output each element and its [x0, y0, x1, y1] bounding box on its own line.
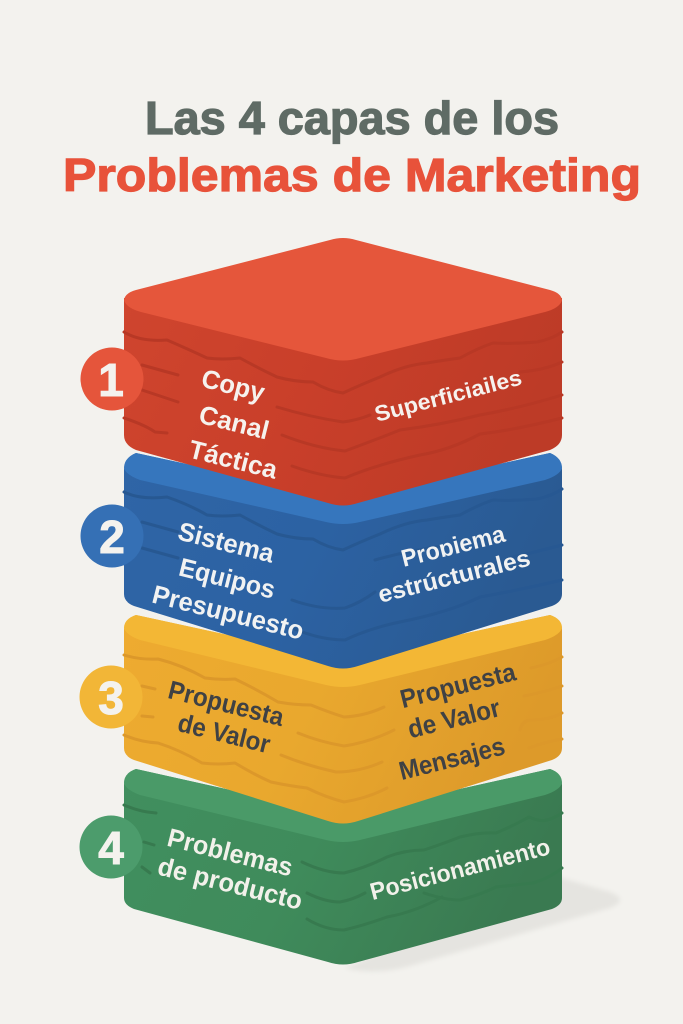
layer 4 left text: de producto: de producto [155, 851, 306, 916]
layer 2 body [124, 453, 562, 668]
layer 2 top rim [124, 453, 562, 524]
badge 1 [80, 348, 144, 410]
layer 3 right text: propuesta: Propuesta [397, 656, 519, 714]
layer 1 wave lines [124, 332, 562, 478]
layer 1 left text: canal: Canal [196, 399, 272, 445]
layer 2 right text: problema: Proɒiema [398, 521, 508, 573]
layer 1 left text: copy: Copy [198, 363, 268, 408]
layer 2: blue [124, 453, 562, 668]
layer 4 wave lines [124, 805, 562, 930]
layer 2 right text: estructurales: estrúcturales [375, 545, 533, 609]
layer 1 right text: Superficiailes [372, 365, 524, 427]
badge 2 [80, 504, 144, 568]
title line 1: Las 4 capas de los [145, 92, 559, 144]
layer 1 top face [124, 238, 562, 360]
badge 2: 2 [99, 511, 125, 563]
title [63, 92, 641, 201]
layer 2 left text: equipos: Equipos [176, 552, 278, 605]
badge 4 [80, 816, 142, 878]
layer 4 top rim [124, 769, 562, 842]
layer 2 wave lines [124, 489, 562, 640]
badge 1: 1 [98, 354, 124, 406]
layer 4 left text: problemas: Problemas [164, 822, 296, 882]
badge 3: 3 [98, 672, 124, 724]
layer 3 body [124, 615, 562, 824]
layer 2 left text: sistema: Sistema [175, 516, 278, 569]
layer 3 wave lines [124, 655, 562, 802]
layer 3 left text: propuesta: Propuesta [165, 674, 288, 732]
layer 3: yellow [124, 615, 562, 824]
layer 1: red [124, 238, 562, 506]
layer 3 top rim [124, 615, 562, 687]
layer 2 left text: presupuesto: Presupuesto [149, 579, 307, 646]
layer 4 body [124, 769, 562, 964]
layer 3 right text: de valor: de Valor [405, 692, 503, 744]
title line 2: Problemas de Marketing [63, 149, 641, 201]
badge 4: 4 [98, 822, 124, 874]
layer 4: green [124, 769, 562, 964]
layer 3 left text: de valor: de Valor [175, 707, 273, 759]
layer 3 right text: mensajes: Mensajes [396, 731, 508, 786]
layer 1 body [124, 298, 562, 506]
layer 1 left text: tactica: Táctica [186, 434, 281, 485]
ground shadow [345, 876, 620, 972]
layer 4 right text: Posicionamiento [367, 834, 553, 906]
badge 3 [80, 666, 142, 728]
